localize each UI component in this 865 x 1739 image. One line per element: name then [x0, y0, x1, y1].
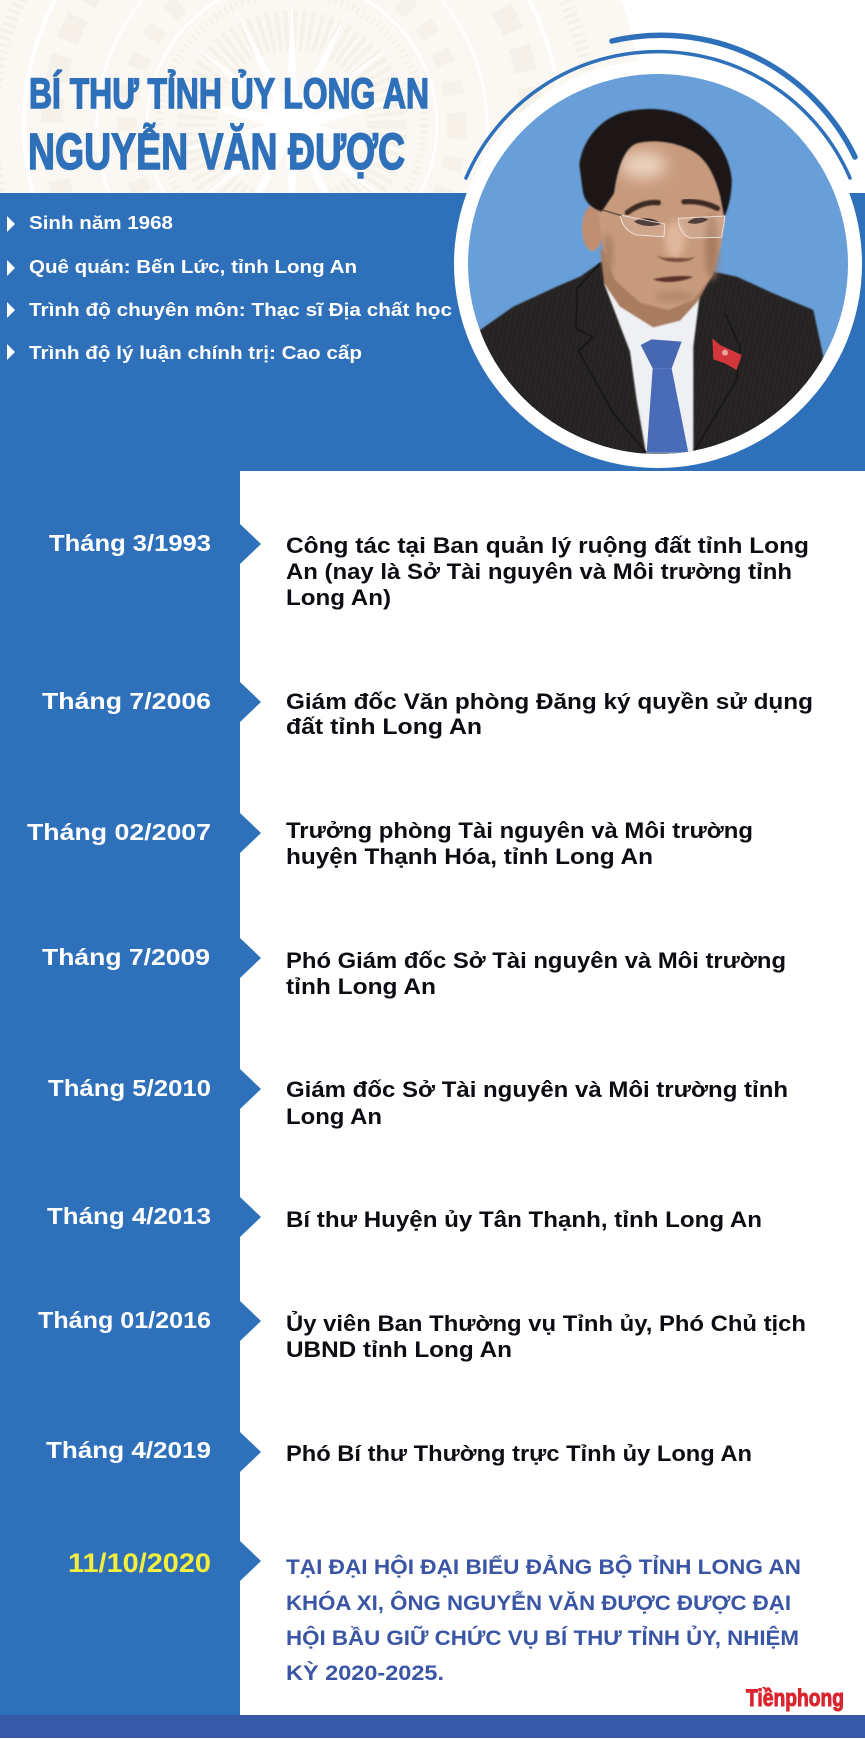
glasses — [603, 210, 725, 238]
timeline entry 9: highlight: TẠI ĐẠI HỘI ĐẠI BIỂU ĐẢNG BỘ TỈNH LONG AN — [286, 1554, 801, 1579]
timeline entry 6: Tháng 4/2013 — [47, 1203, 211, 1229]
text: expertise: Trình độ chuyên môn: Thạc sĩ Địa chất học — [29, 299, 452, 320]
mouth — [653, 276, 693, 282]
timeline entry 8 — [46, 1432, 752, 1472]
timeline entry 5 — [48, 1069, 788, 1129]
timeline entry 2: Tháng 7/2006 — [42, 688, 211, 714]
timeline entry 5: Tháng 5/2010 — [48, 1075, 211, 1101]
timeline entry 8: Tháng 4/2019 — [46, 1437, 211, 1463]
timeline entry 4 — [42, 938, 786, 999]
header background pattern — [0, 0, 638, 193]
timeline entry 2: Giám đốc Văn phòng Đăng ký quyền sử dụng — [286, 689, 813, 714]
portrait frame — [454, 60, 862, 468]
timeline entry 9: highlight: 11/10/2020 — [68, 1548, 211, 1578]
text: birth year: Sinh năm 1968 — [29, 212, 173, 233]
bullet: birth year — [7, 216, 15, 232]
text: hometown: Quê quán: Bến Lức, tỉnh Long An — [29, 256, 357, 277]
timeline entry 7: Tháng 01/2016 — [38, 1307, 211, 1333]
decorative arc: outer — [612, 35, 855, 157]
lapels — [576, 263, 740, 453]
timeline entry 6 — [47, 1197, 762, 1237]
profile list — [7, 212, 452, 363]
timeline entry 8: Phó Bí thư Thường trực Tỉnh ủy Long An — [286, 1441, 752, 1466]
footer bar — [0, 1715, 865, 1738]
neck — [601, 247, 713, 327]
timeline entry 7: UBND tỉnh Long An — [286, 1337, 512, 1362]
hair — [579, 109, 732, 217]
timeline entry 6: Bí thư Huyện ủy Tân Thạnh, tỉnh Long An — [286, 1207, 762, 1232]
portrait — [480, 109, 823, 480]
timeline entry 1: Long An) — [286, 585, 391, 610]
timeline entry 1 — [49, 524, 809, 610]
bullet: hometown — [7, 260, 15, 276]
suit — [480, 261, 824, 454]
timeline entry 9: highlight: KHÓA XI, ÔNG NGUYỄN VĂN ĐƯỢC ĐƯỢC ĐẠI — [286, 1589, 791, 1615]
face — [598, 135, 725, 310]
timeline entry 9: highlight: HỘI BẦU GIỮ CHỨC VỤ BÍ THƯ TỈNH ỦY, NHIỆM — [286, 1625, 799, 1650]
timeline entry 3 — [27, 813, 753, 869]
timeline entry 1: Tháng 3/1993 — [49, 530, 211, 556]
text: political level: Trình độ lý luận chính trị: Cao cấp — [29, 342, 362, 363]
face shading — [604, 152, 718, 301]
timeline entry 5: Giám đốc Sở Tài nguyên và Môi trường tỉnh — [286, 1077, 788, 1102]
decorative arc: inner — [466, 52, 850, 178]
timeline entry 4: tỉnh Long An — [286, 974, 436, 999]
nose — [657, 255, 695, 262]
timeline entry 3: Trưởng phòng Tài nguyên và Môi trường — [286, 818, 753, 843]
shirt — [604, 283, 699, 453]
timeline entry 9: highlight: KỲ 2020-2025. — [286, 1660, 444, 1685]
logo: Tiền phong: Tiềnphong — [746, 1685, 844, 1712]
eyebrows — [627, 201, 717, 213]
lapel pin — [712, 338, 742, 370]
timeline entry 7 — [38, 1301, 806, 1362]
panel: blue profile band — [0, 193, 865, 471]
timeline entry 1: An (nay là Sở Tài nguyên và Môi trường tỉnh — [286, 559, 792, 584]
timeline entry 2 — [42, 682, 813, 739]
panel: timeline date column — [0, 471, 240, 1715]
timeline entry 5: Long An — [286, 1104, 382, 1129]
title: BÍ THƯ TỈNH ỦY LONG AN — [29, 69, 429, 118]
timeline entry 3: huyện Thạnh Hóa, tỉnh Long An — [286, 844, 653, 869]
timeline entry 9: highlight — [68, 1541, 801, 1685]
timeline entry 4: Phó Giám đốc Sở Tài nguyên và Môi trường — [286, 948, 786, 973]
timeline entry 1: Công tác tại Ban quản lý ruộng đất tỉnh Long — [286, 533, 809, 558]
bullet: expertise — [7, 302, 15, 318]
tie — [641, 339, 688, 453]
timeline entry 7: Ủy viên Ban Thường vụ Tỉnh ủy, Phó Chủ tịch — [286, 1311, 806, 1336]
timeline entry 3: Tháng 02/2007 — [27, 819, 211, 845]
bullet: political level — [7, 344, 15, 360]
title — [28, 69, 429, 180]
title: NGUYỄN VĂN ĐƯỢC — [28, 122, 405, 180]
ear — [582, 206, 603, 251]
eyes — [634, 217, 708, 226]
timeline entry 4: Tháng 7/2009 — [42, 944, 210, 970]
timeline entry 2: đất tỉnh Long An — [286, 714, 482, 739]
